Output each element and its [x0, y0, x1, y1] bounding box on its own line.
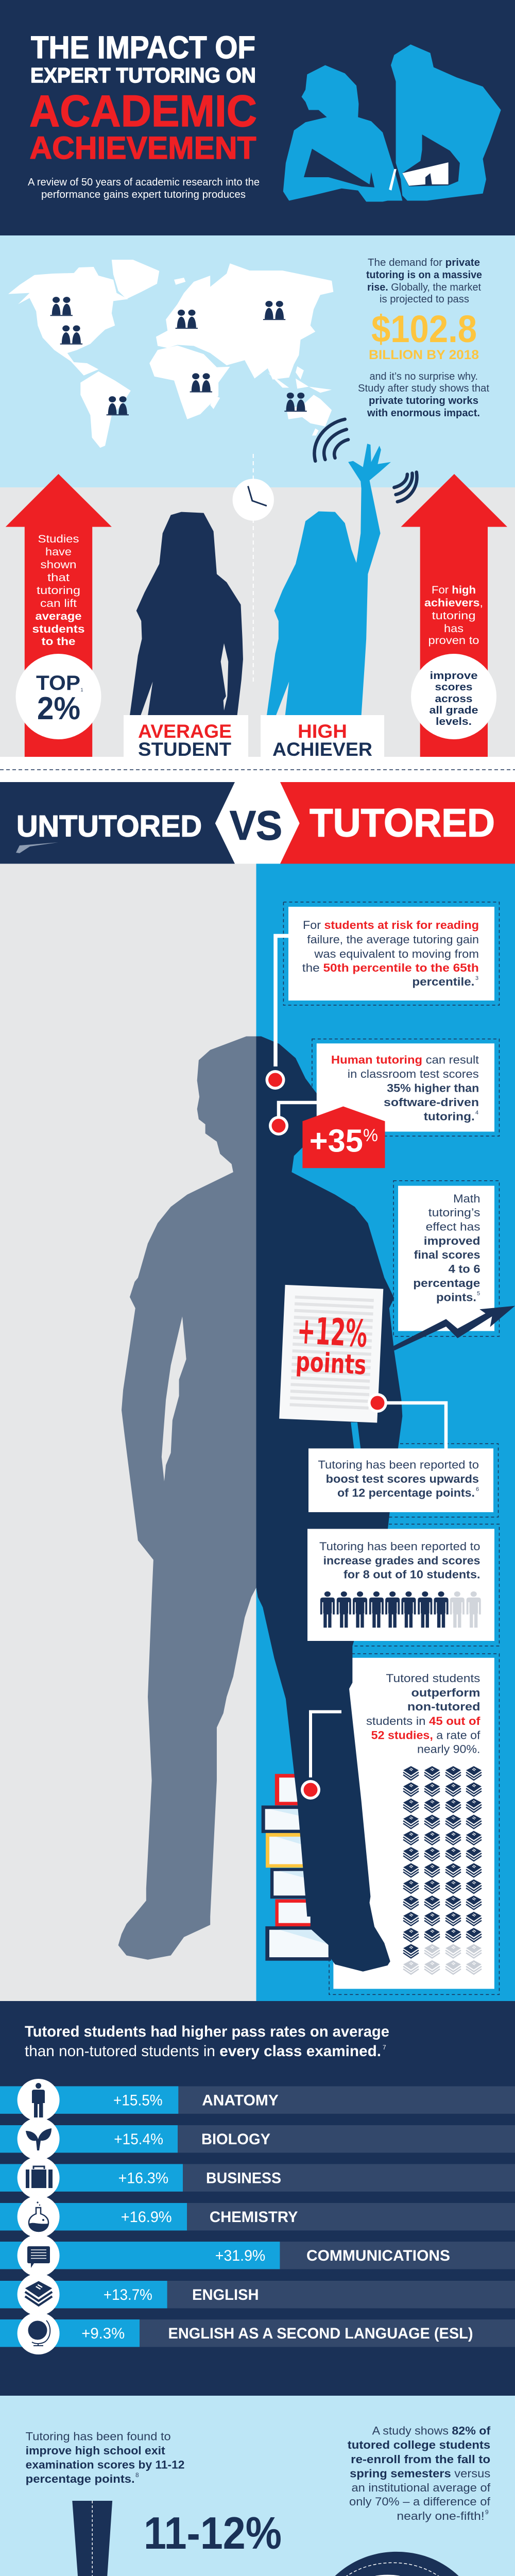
- arrow: rising zig-zag trend: [393, 1306, 515, 1351]
- panel: 45 out of 52 studies text: [366, 1672, 480, 1756]
- panel: market demand text: tutoring is on a massive: [366, 269, 482, 281]
- arrow: high achievers lift: [401, 474, 507, 757]
- illustration: test paper with +12% points: +12%: [296, 1309, 368, 1355]
- bar: communications: COMMUNICATIONS: [306, 2247, 450, 2264]
- title: THE IMPACT OF: [31, 30, 255, 65]
- bar: biology: [0, 2125, 515, 2153]
- icon: sound waves around raised hand: [314, 419, 417, 502]
- panel: test scores callout: of 12 percentage points.: [337, 1486, 475, 1499]
- bar: anatomy: +15.5%: [113, 2092, 163, 2109]
- arrow: high achievers lift: proven to: [428, 635, 479, 647]
- panel: reading failure callout: 3: [475, 975, 478, 981]
- panel: market demand text: BILLION BY 2018: [369, 348, 479, 362]
- icon: anatomy person: [18, 2079, 60, 2121]
- arrow: high achievers lift: achievers ,: [424, 597, 483, 609]
- arrow: high achievers lift: across: [435, 693, 473, 705]
- label: average student: STUDENT: [138, 739, 231, 760]
- bar: communications: [0, 2242, 515, 2269]
- arrow: average students lift: [6, 474, 112, 757]
- title: ACHIEVEMENT: [30, 130, 256, 165]
- arrow: high achievers lift: tutoring: [432, 610, 476, 622]
- icon: english books: [18, 2273, 60, 2315]
- arrow: average students lift: TOP: [36, 672, 80, 694]
- bar: business: [0, 2164, 515, 2192]
- text: re-enrollment study: nearly one-fifth!: [397, 2510, 485, 2522]
- arrow: high achievers lift: all grade: [430, 705, 478, 716]
- bar: chemistry: +16.9%: [121, 2209, 172, 2226]
- arrow: average students lift: tutoring: [37, 585, 80, 597]
- label: high achiever: HIGH: [298, 721, 347, 742]
- icon grid: 45 of 52 book stacks: [403, 1766, 482, 1974]
- heading: pass rates: 7: [383, 2044, 386, 2051]
- label: average student: AVERAGE: [138, 721, 232, 742]
- panel: math tutoring callout: effect has: [426, 1220, 480, 1233]
- arrow: average students lift: students: [32, 623, 84, 635]
- arrow: high achievers lift: levels.: [436, 716, 472, 727]
- heading: pass rates: [25, 2023, 389, 2060]
- bar: esl: +9.3%: [81, 2325, 125, 2342]
- text: re-enrollment study: [348, 2425, 491, 2522]
- icon: communications chat bubble: [18, 2234, 60, 2277]
- badge: +35%: +35: [310, 1124, 363, 1159]
- panel: math tutoring callout: 4 to 6: [449, 1262, 480, 1276]
- arrow: average students lift: can lift: [40, 598, 77, 609]
- bar: chemistry: CHEMISTRY: [210, 2209, 298, 2226]
- text: re-enrollment study: re-enroll from the fall to: [351, 2453, 490, 2466]
- arrow: pointing to university: [72, 2501, 173, 2576]
- panel: market demand text: private tutoring works: [369, 395, 478, 406]
- panel: reading failure callout: was equivalent to moving from: [314, 947, 479, 960]
- panel: human tutoring callout: 4: [475, 1110, 478, 1116]
- panel: reading failure callout: the 50th percentile to the 65th: [302, 961, 479, 974]
- arrow: average students lift: Studies: [38, 533, 79, 545]
- arrow: average students lift: that: [47, 572, 70, 584]
- text: re-enrollment study: A study shows 82% of: [372, 2425, 491, 2437]
- panel: human tutoring callout: software-driven: [384, 1096, 479, 1109]
- icon: chemistry flask: [18, 2196, 60, 2238]
- arrow: average students lift: have: [45, 546, 72, 558]
- icon: business briefcase: [18, 2157, 60, 2199]
- panel: math tutoring callout: Math: [453, 1192, 480, 1205]
- panel: 45 out of 52 studies text: Tutored students: [386, 1672, 480, 1685]
- panel: reading failure callout: [266, 907, 494, 1090]
- bar: biology: +15.4%: [114, 2131, 163, 2148]
- heading: pass rates: than non-tutored students in every class examined.: [25, 2043, 381, 2060]
- illustration: half tutored half untutored body silhouette: [118, 1036, 402, 1972]
- bar: anatomy: [0, 2086, 515, 2114]
- panel: math tutoring callout: tutoring’s: [428, 1206, 480, 1219]
- panel: math tutoring callout: improved: [424, 1234, 480, 1247]
- illustration: tutor and student silhouettes: [283, 44, 501, 201]
- subtitle: A review of 50 years of academic research into the: [28, 177, 260, 188]
- panel: reading failure callout: percentile.: [412, 975, 474, 988]
- stat: 11-12%: 11-12%: [144, 2507, 282, 2558]
- connector: test score callout: [368, 1393, 446, 1450]
- arrow: average students lift: 2%: [37, 691, 80, 726]
- title: EXPERT TUTORING ON: [30, 63, 256, 87]
- icon: esl globe: [18, 2312, 60, 2354]
- panel: market demand text: rise. Globally, the market: [367, 282, 481, 293]
- badge: +35%: %: [363, 1126, 378, 1145]
- heading: pass rates: Tutored students had higher pass rates on average: [25, 2023, 389, 2040]
- panel: human tutoring callout: 35% higher than: [387, 1082, 479, 1094]
- text: exit examination scores: examination scores by 11-12: [26, 2459, 184, 2471]
- frames: dashed callout outlines: [283, 902, 499, 1994]
- panel: 8 out of 10 students: Tutoring has been reported to: [319, 1540, 480, 1553]
- bar: chemistry: [0, 2203, 515, 2230]
- panel: 45 out of 52 studies text: non-tutored: [407, 1700, 480, 1713]
- arrow: average students lift: average: [35, 611, 81, 622]
- bar: business: +16.3%: [118, 2170, 168, 2187]
- panel: test scores callout: boost test scores upwards: [326, 1472, 479, 1485]
- bar: english: [0, 2281, 515, 2308]
- panel: market demand text: with enormous impact.: [367, 408, 480, 419]
- subtitle: performance gains expert tutoring produces: [41, 189, 246, 200]
- panel: 8 out of 10 students: increase grades and scores: [323, 1554, 480, 1567]
- panel: 45 out of 52 studies text: outperform: [411, 1686, 480, 1699]
- label: high achiever: ACHIEVER: [272, 739, 372, 760]
- label: average student: [124, 715, 248, 760]
- panel: market demand text: [358, 257, 489, 419]
- panel: 45 out of 52 studies text: students in 45 out of: [366, 1715, 480, 1727]
- arrow: average students lift: 1: [80, 687, 83, 692]
- title: ACADEMIC: [29, 87, 257, 136]
- text: re-enrollment study: only 70% – a difference of: [349, 2495, 491, 2508]
- banner: untutored vs tutored: UNTUTORED: [16, 810, 202, 843]
- panel: math tutoring callout: final scores: [414, 1248, 480, 1261]
- arrow: average students lift: to the: [41, 636, 75, 648]
- panel: market demand text: The demand for private: [368, 257, 480, 268]
- text: re-enrollment study: tutored college students: [348, 2438, 490, 2451]
- panel: market demand text: and it’s no surprise why.: [370, 371, 478, 382]
- text: exit examination scores: Tutoring has been found to: [26, 2430, 171, 2443]
- title: [29, 30, 257, 165]
- illustration: average student and high achiever silhouettes: [130, 444, 391, 716]
- panel: human tutoring callout: in classroom test scores: [348, 1067, 479, 1080]
- panel: math tutoring callout: [398, 1186, 494, 1331]
- text: re-enrollment study: an institutional average of: [351, 2481, 491, 2494]
- bar: english: +13.7%: [104, 2286, 152, 2303]
- panel: math tutoring callout: percentage: [413, 1277, 480, 1290]
- arrow: high achievers lift: For high: [432, 584, 476, 596]
- panel: test scores callout: Tutoring has been reported to: [318, 1458, 479, 1471]
- world map with student icons: [8, 260, 333, 448]
- illustration: test paper with +12% points: points: [295, 1346, 367, 1381]
- panel: math tutoring callout: 5: [477, 1291, 480, 1297]
- illustration: stack of books: [262, 1774, 331, 1961]
- panel: human tutoring callout: Human tutoring can result: [331, 1053, 479, 1066]
- banner: untutored vs tutored: TUTORED: [310, 801, 495, 845]
- panel: market demand text: is projected to pass: [380, 294, 469, 305]
- bar: business: BUSINESS: [206, 2170, 281, 2187]
- panel: 45 out of 52 studies text: 52 studies, a rate of: [371, 1729, 480, 1742]
- text: exit examination scores: improve high school exit: [26, 2444, 165, 2457]
- subtitle: [28, 177, 260, 200]
- panel: market demand text: $102.8: [371, 308, 477, 350]
- bar chart: pass rates by class: [0, 2086, 515, 2347]
- panel: 8 out of 10 students: for 8 out of 10 students.: [344, 1568, 480, 1581]
- label: high achiever: [261, 715, 384, 760]
- icon: biology plant: [18, 2117, 60, 2160]
- illustration: test paper with +12% points: [279, 1285, 383, 1423]
- arrow: average students lift: shown: [40, 559, 76, 571]
- panel: 45 out of 52 studies text: nearly 90%.: [417, 1742, 480, 1756]
- badge: +35%: [302, 1107, 385, 1168]
- chart: 82% circular arrow: [306, 2552, 487, 2576]
- text: exit examination scores: 8: [135, 2471, 139, 2479]
- panel: math tutoring callout: points.: [436, 1291, 476, 1303]
- arrow: high achievers lift: improve: [430, 670, 478, 682]
- bar: anatomy: ANATOMY: [202, 2092, 279, 2109]
- banner: untutored vs tutored: VS: [230, 803, 282, 848]
- text: re-enrollment study: 9: [485, 2509, 489, 2516]
- arrow: high achievers lift: scores: [435, 682, 473, 693]
- panel: human tutoring callout: [317, 1043, 494, 1131]
- text: exit examination scores: percentage points.: [26, 2472, 135, 2485]
- banner: untutored vs tutored: [0, 782, 515, 863]
- bar: esl: ENGLISH AS A SECOND LANGUAGE (ESL): [168, 2325, 473, 2342]
- panel: test scores callout: 6: [476, 1486, 479, 1493]
- panel: human tutoring callout: tutoring.: [424, 1110, 475, 1123]
- panel: market demand text: Study after study shows that: [358, 383, 489, 394]
- panel: reading failure callout: failure, the average tutoring gain: [307, 933, 479, 946]
- text: re-enrollment study: spring semesters versus: [350, 2467, 490, 2480]
- bar: communications: +31.9%: [215, 2247, 265, 2264]
- bar: biology: BIOLOGY: [201, 2131, 270, 2148]
- bar: esl: [0, 2319, 515, 2347]
- arrow: high achievers lift: has: [444, 623, 464, 635]
- text: exit examination scores: [26, 2430, 184, 2485]
- connector: outperform callout: [301, 1711, 341, 1800]
- panel: test scores callout: [308, 1448, 493, 1512]
- bar: english: ENGLISH: [192, 2286, 259, 2303]
- panel: 8 out of 10 students: [307, 1529, 494, 1641]
- panel: reading failure callout: For students at risk for reading: [303, 919, 479, 931]
- panel background: 45 out of 52 studies: [333, 1658, 494, 1989]
- connector: human tutoring: [269, 1103, 317, 1136]
